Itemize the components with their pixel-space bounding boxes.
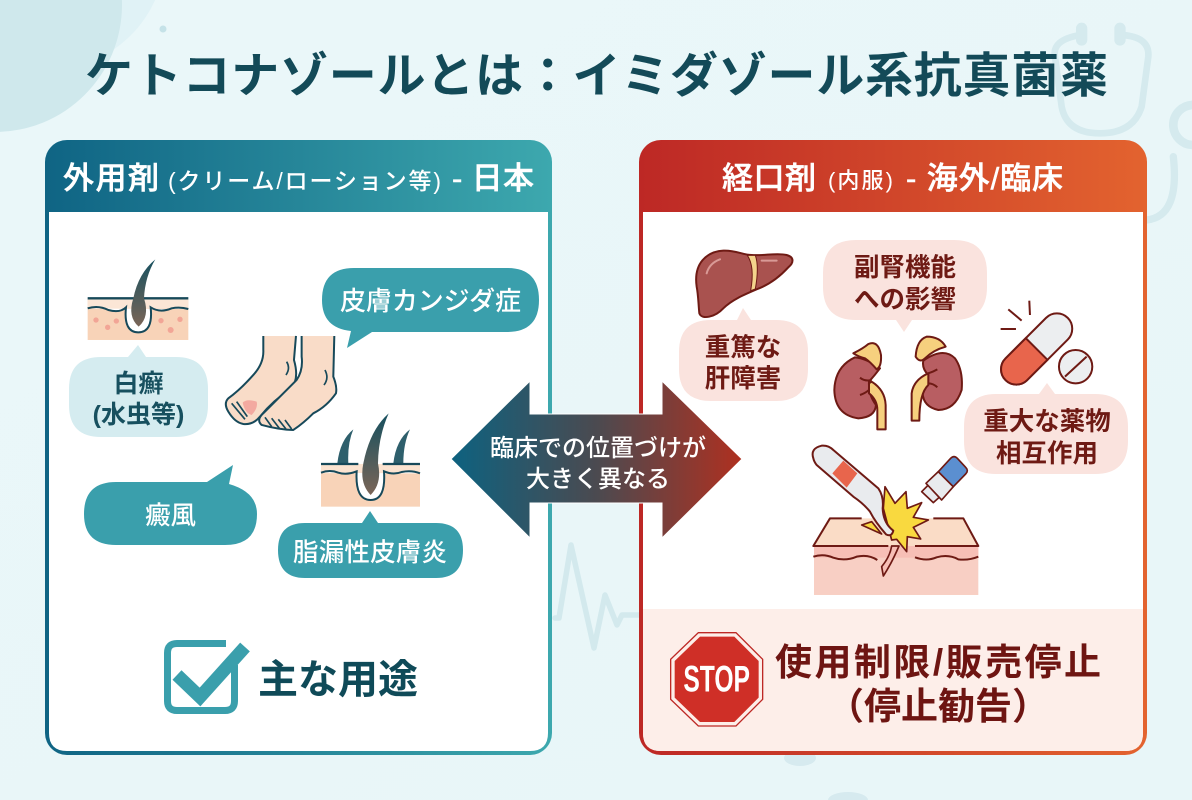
callout: cutaneous candidiasis: 皮膚カンジダ症 <box>340 286 521 316</box>
callout: severe liver injury: 重篤な <box>705 334 781 362</box>
panel header text: - 海外/臨床 <box>906 161 1063 196</box>
callout: adrenal function: への影響 <box>854 286 956 314</box>
panel header text <box>722 161 1063 196</box>
callout: tinea: 白癬 <box>113 370 164 398</box>
warning band <box>643 609 1143 751</box>
icon: skin with topical tube and burst <box>813 446 978 595</box>
panel header text: - 日本 <box>452 161 534 196</box>
icon: scalp hair follicles <box>321 413 420 507</box>
background decoration: heartbeat line <box>555 545 640 648</box>
panel body <box>49 212 548 751</box>
icon: skin with hair follicle <box>88 259 188 340</box>
callout: severe liver injury: 肝障害 <box>705 365 781 393</box>
icon: liver <box>696 251 792 317</box>
callout: tinea versicolor <box>84 465 257 545</box>
icon: stop sign: STOP <box>683 659 750 700</box>
callout: drug interactions: 相互作用 <box>996 440 1098 468</box>
callout: tinea: (水虫等) <box>93 401 184 429</box>
background decoration: circles <box>0 0 166 132</box>
callout: tinea <box>69 345 208 437</box>
callout: drug interactions <box>964 383 1128 474</box>
panel header text: (クリーム/ローション等) <box>168 168 441 194</box>
panel frame <box>45 140 552 755</box>
restriction text: （停止勧告） <box>827 686 1049 727</box>
callout: seborrheic dermatitis: 脂漏性皮膚炎 <box>293 539 447 567</box>
icon: stop sign <box>671 633 763 726</box>
callout: seborrheic dermatitis <box>278 511 463 578</box>
icon: kidneys <box>834 337 962 429</box>
background decoration: bottom shapes <box>784 750 868 800</box>
restriction text: 使用制限/販売停止 <box>775 642 1101 683</box>
double arrow: 臨床での位置づけが <box>490 435 706 462</box>
icon: check box <box>168 644 245 710</box>
double arrow <box>451 381 742 538</box>
panel frame <box>639 140 1147 755</box>
panel body <box>643 212 1143 751</box>
panel header text: (内服) <box>828 168 893 193</box>
double arrow: 大きく異なる <box>526 466 670 493</box>
left kidney <box>834 343 886 429</box>
callout: tinea versicolor: 癜風 <box>145 502 196 530</box>
callout: drug interactions: 重大な薬物 <box>983 408 1111 436</box>
callout: severe liver injury <box>679 308 808 401</box>
callout: adrenal function <box>823 240 987 332</box>
panel header text: 外用剤 <box>63 161 159 196</box>
icon: pills <box>995 301 1092 391</box>
callout: adrenal function: 副腎機能 <box>854 254 956 282</box>
title: ケトコナゾールとは：イミダゾール系抗真菌薬 <box>85 50 1108 103</box>
background decoration: stethoscope <box>1055 28 1192 220</box>
icon: feet <box>226 336 336 430</box>
main use label: 主な用途 <box>258 658 418 702</box>
panel: topical <box>45 140 552 755</box>
panel header text <box>63 161 534 196</box>
callout: cutaneous candidiasis <box>322 268 539 348</box>
panel: oral <box>639 140 1147 755</box>
right kidney <box>912 337 962 421</box>
restriction text <box>775 642 1101 727</box>
panel header text: 経口剤 <box>722 161 816 196</box>
